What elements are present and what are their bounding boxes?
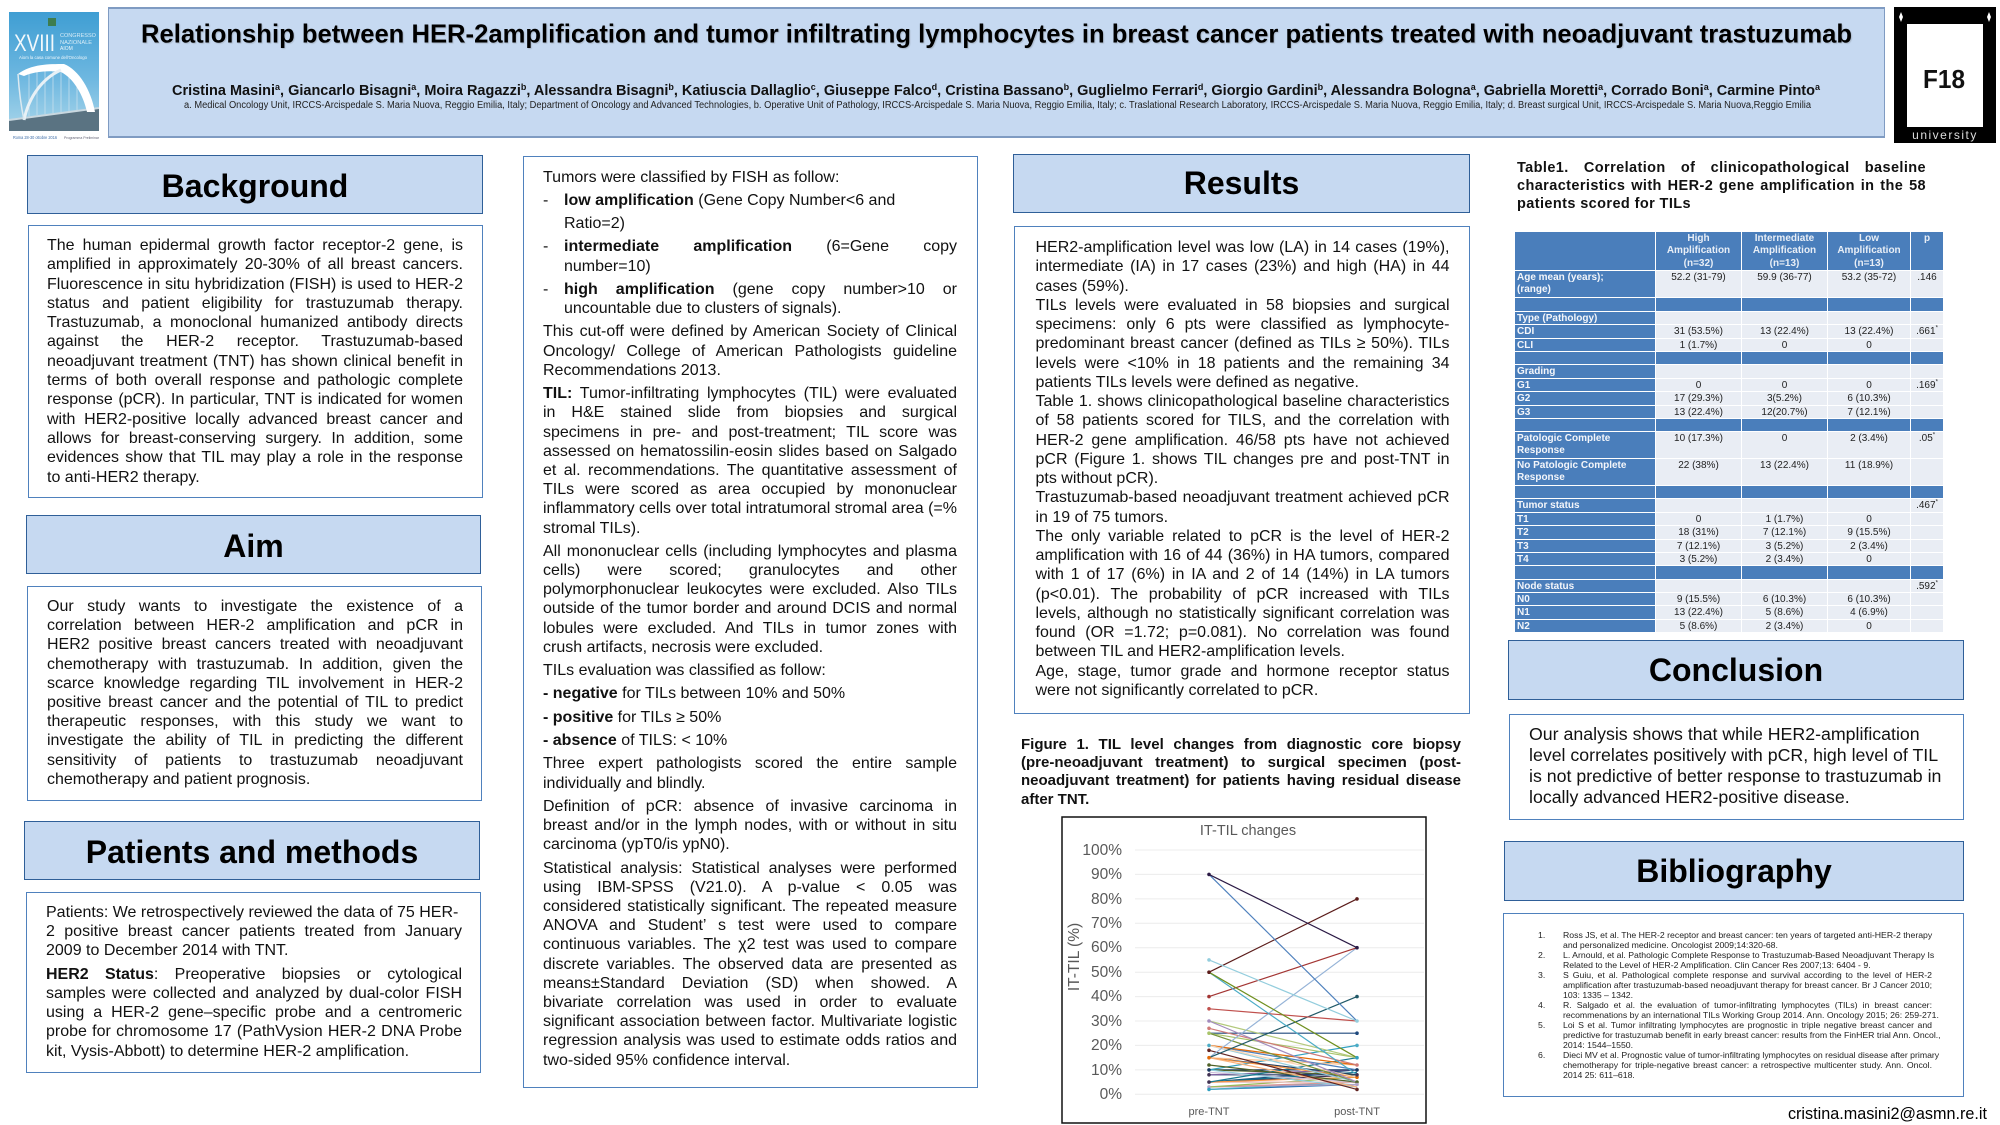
panel: background text: Trastuzumab, a monoclonal humanized antibody directs xyxy=(47,314,463,331)
heading: Results xyxy=(1013,154,1470,213)
table: clinicopathological characteristics: T2 xyxy=(1517,527,1529,538)
table: clinicopathological characteristics: 2 (3.4%) xyxy=(1850,433,1888,444)
figure caption: after TNT. xyxy=(1021,791,1089,808)
heading: Bibliography: Bibliography xyxy=(1636,852,1832,888)
panel: bibliography: chemotherapy for triple-negative breast cancer: a retrospective multicenter study. Ann. Oncol. xyxy=(1563,1060,1932,1070)
panel: results text: in 19 of 75 tumors. xyxy=(1036,508,1168,526)
table: clinicopathological characteristics: 1 (1.7%) xyxy=(1766,514,1803,525)
panel: bibliography: 4. xyxy=(1538,1000,1545,1010)
panel: patients and methods text: 2009 to December 2014 with TNT. xyxy=(46,942,288,959)
panel: results text: TILs levels were evaluated in 58 biopsies and surgical xyxy=(1036,297,1450,314)
panel: methods continued: breast and/or in the lymph nodes, with or without in situ xyxy=(543,817,957,834)
panel: methods continued: assessed on hematossilin-eosin slides based on Salgado xyxy=(543,443,957,460)
table: clinicopathological characteristics: 0 xyxy=(1782,433,1787,444)
heading: Bibliography xyxy=(1504,841,1964,901)
line chart: IT-TIL changes: 0% xyxy=(1100,1086,1122,1103)
panel: aim text: sensitivity of patients to trastuzumab neoadjuvant xyxy=(47,752,463,769)
table: clinicopathological characteristics: 6 (10.3%) xyxy=(1847,594,1891,605)
panel: aim text: therapeutic responses, with this study we want to xyxy=(47,713,463,730)
panel: results text: were not significantly correlated to pCR. xyxy=(1036,682,1318,699)
panel: conclusion text: locally advanced HER2-positive disease. xyxy=(1529,787,1850,807)
table: clinicopathological characteristics: (n=13) xyxy=(1770,258,1799,269)
table: clinicopathological characteristics: G2 xyxy=(1517,393,1530,404)
panel: patients and methods text: Patients: We retrospectively reviewed the data of 75 HER- xyxy=(46,904,458,921)
line chart: IT-TIL changes: 30% xyxy=(1091,1013,1122,1030)
table: clinicopathological characteristics: Amplification xyxy=(1837,245,1901,256)
figure caption: (pre-neoadjuvant treatment) to surgical specimen (post- xyxy=(1021,754,1461,771)
line chart: IT-TIL changes: 60% xyxy=(1091,939,1122,956)
title xyxy=(141,18,1852,111)
table title: Table1. Correlation of clinicopathological baseline xyxy=(1517,160,1926,176)
panel: bibliography: 6. xyxy=(1538,1050,1545,1060)
panel: methods continued: uncountable due to clusters of signals). xyxy=(564,300,842,317)
panel: results text: Table 1. shows clinicopathological baseline characteristics xyxy=(1036,393,1450,410)
table: clinicopathological characteristics: 59.9 (36-77) xyxy=(1757,272,1812,283)
table: clinicopathological characteristics: N2 xyxy=(1517,621,1530,632)
table title: patients scored for TILs xyxy=(1517,196,1691,212)
table: clinicopathological characteristics: T1 xyxy=(1517,514,1529,525)
table: clinicopathological characteristics: 0 xyxy=(1782,340,1787,351)
panel: methods continued: means±Standard Deviation (SD) when showed. A xyxy=(543,975,957,992)
table: clinicopathological characteristics: N0 xyxy=(1517,594,1530,605)
panel: results text: cases (59%). xyxy=(1036,278,1129,294)
table: clinicopathological characteristics: CLI xyxy=(1517,340,1533,351)
table: clinicopathological characteristics: 2 (3.4%) xyxy=(1766,621,1803,632)
table title: characteristics with HER-2 gene amplification in the 58 xyxy=(1517,178,1926,194)
title: Cristina Masinia, Giancarlo Bisagnia, Moira Ragazzib, Alessandra Bisagnib, Katiuscia Dallaglioc, Giuseppe Falcod, Cristina Bassanob, Guglielmo Ferrarid, Giorgio Gardinib, Alessandra Bolognaa, Gabriella Morettia, Corrado Bonia, Carmine Pintoa xyxy=(172,82,1821,99)
panel: results text: found (OR =1.72; p=0.081). No correlation was found xyxy=(1036,624,1450,641)
icon: congress poster: XVIII xyxy=(14,29,55,56)
icon: congress poster: Aiom la casa comune dell'Oncologo xyxy=(19,55,88,60)
heading: Conclusion: Conclusion xyxy=(1649,652,1823,688)
title: Relationship between HER-2amplification and tumor infiltrating lymphocytes in breast cancer patients treated with neoadjuvant trastuzumab xyxy=(141,18,1852,48)
table: clinicopathological characteristics: 0 xyxy=(1696,380,1701,391)
panel: aim text: chemotherapy with trastuzumab. In addition, given the xyxy=(47,656,463,673)
panel: conclusion text xyxy=(1509,714,1964,820)
line chart: IT-TIL changes: 10% xyxy=(1091,1062,1122,1079)
panel: bibliography: Related to the Level of HER-2 Amplification. Clin Cancer Res 2007;13: 6404 - 9. xyxy=(1563,960,1871,970)
panel: methods continued: using IBM-SPSS (V21.0). A p-value < 0.05 was xyxy=(543,879,957,896)
panel: methods continued: low amplification (Gene Copy Number<6 and xyxy=(564,192,895,209)
table: clinicopathological characteristics: 3(5.2%) xyxy=(1767,393,1802,404)
panel: bibliography: R. Salgado et al. the evaluation of tumor-infiltrating lymphocytes (TILs) in breast cancer: xyxy=(1563,1000,1932,1010)
table: clinicopathological characteristics: Amplification xyxy=(1753,245,1816,256)
table: clinicopathological characteristics: 12(20.7%) xyxy=(1761,407,1808,418)
table: clinicopathological characteristics: Tumor status xyxy=(1517,500,1580,511)
table: clinicopathological characteristics: 3 (5.2%) xyxy=(1766,541,1803,552)
table: clinicopathological characteristics: p xyxy=(1924,233,1930,244)
table: clinicopathological characteristics: Intermediate xyxy=(1755,233,1814,244)
table: clinicopathological characteristics: 11 (18.9%) xyxy=(1845,460,1893,471)
heading: Aim: Aim xyxy=(223,528,284,564)
heading: Patients and methods xyxy=(24,821,480,880)
panel: bibliography: 2. xyxy=(1538,950,1545,960)
table: clinicopathological characteristics: Type (Pathology) xyxy=(1517,313,1597,324)
table: clinicopathological characteristics: High xyxy=(1687,233,1710,244)
heading: Aim xyxy=(26,515,481,574)
panel: results text: patients TILs levels were defined as negative. xyxy=(1036,374,1359,391)
table: clinicopathological characteristics: 9 (15.5%) xyxy=(1847,527,1891,538)
panel: methods continued: Oncology/ College of American Pathologists guideline xyxy=(543,343,957,360)
table: clinicopathological characteristics: N1 xyxy=(1517,607,1530,618)
panel: bibliography: L. Arnould, et al. Pathologic Complete Response to Trastuzumab-Based Neoadjuvant Therapy Is xyxy=(1563,950,1934,960)
panel: bibliography: 2014: 1544–1550. xyxy=(1563,1040,1633,1050)
line chart: IT-TIL changes: 50% xyxy=(1091,964,1122,981)
panel: methods continued: regression analysis was used to estimate odds ratios and xyxy=(543,1032,957,1049)
panel: background text xyxy=(28,225,483,498)
panel: methods continued: TIL: Tumor-infiltrating lymphocytes (TIL) were evaluated xyxy=(543,385,957,402)
table: clinicopathological characteristics xyxy=(1515,232,1943,632)
header banner xyxy=(108,7,1885,138)
panel: bibliography: Dieci MV et al. Prognostic value of tumor-infiltrating lymphocytes on residual disease after primary xyxy=(1563,1050,1939,1060)
heading: Conclusion xyxy=(1508,640,1964,700)
panel: aim text: HER2 positive breast cancers treated with neoadjuvant xyxy=(47,636,463,653)
panel: background text: Fluorescence in situ hybridization (FISH) is used to HER-2 xyxy=(47,276,463,293)
table: clinicopathological characteristics: Patologic Complete xyxy=(1517,433,1610,444)
panel: methods continued: individually and blindly. xyxy=(543,775,705,792)
panel: methods continued: et al. recommendations. The quantitative assessment of xyxy=(543,462,957,479)
panel: background text: amplified in approximately 20-30% of all breast cancers. xyxy=(47,256,463,273)
table: clinicopathological characteristics: 13 (22.4%) xyxy=(1760,326,1809,337)
panel: patients and methods text xyxy=(26,892,481,1073)
table: clinicopathological characteristics: .169* xyxy=(1916,380,1938,391)
panel: methods continued xyxy=(523,156,978,1088)
panel: results text: (p<0.01). The probability of pCR increased with TILs xyxy=(1036,586,1450,602)
panel: methods continued: - negative for TILs between 10% and 50% xyxy=(543,685,845,702)
panel: aim text: correlation between HER-2 amplification and pCR in xyxy=(47,617,463,634)
table: clinicopathological characteristics: 4 (6.9%) xyxy=(1850,607,1888,618)
table: clinicopathological characteristics: 7 (12.1%) xyxy=(1847,407,1891,418)
panel: bibliography: amplification after trastuzumab-based neoadjuvant therapy for breast cancer. Br J Cancer 2010; xyxy=(1563,980,1932,990)
table: clinicopathological characteristics: No Patologic Complete xyxy=(1517,460,1626,471)
panel: methods continued: considered statistically significant. The repeated measure xyxy=(543,898,957,915)
panel: results text: of 58 patients scored for TILS, and the correlation with xyxy=(1036,412,1450,429)
icon: congress poster xyxy=(9,12,99,140)
table: clinicopathological characteristics: T3 xyxy=(1517,541,1529,552)
table: clinicopathological characteristics: 0 xyxy=(1866,380,1872,391)
table: clinicopathological characteristics: Amplification xyxy=(1667,245,1730,256)
table: clinicopathological characteristics: 10 (17.3%) xyxy=(1674,433,1723,444)
logo: F18 university: F18 xyxy=(1923,64,1965,94)
panel: methods continued: - positive for TILs ≥ 50% xyxy=(543,709,721,726)
panel: background text: status and patient eligibility for trastuzumab therapy. xyxy=(47,295,463,312)
panel: bibliography: Loi S et al. Tumor infiltrating lymphocytes are prognostic in triple negative breast cancer and xyxy=(1563,1020,1932,1030)
panel: methods continued: lobules were excluded. And TILs in tumor zones with xyxy=(543,620,957,637)
line chart: IT-TIL changes: 40% xyxy=(1091,988,1122,1005)
panel: results text: with 1 of 17 (6%) in IA and 2 of 14 (14%) in LA tumors xyxy=(1036,566,1450,583)
panel: aim text: positive breast cancer and the potential of TIL to predict xyxy=(47,694,463,711)
table: clinicopathological characteristics: Grading xyxy=(1517,366,1555,377)
table: clinicopathological characteristics: 0 xyxy=(1866,340,1872,351)
table: clinicopathological characteristics: Low xyxy=(1859,233,1879,244)
table: clinicopathological characteristics: Node status xyxy=(1517,581,1574,592)
panel: bibliography: and personalized medicine. Oncologist 2009;14:320-68. xyxy=(1563,940,1778,950)
panel: methods continued: Ratio=2) xyxy=(564,215,625,232)
table: clinicopathological characteristics: 13 (22.4%) xyxy=(1674,407,1723,418)
table: clinicopathological characteristics: 2 (3.4%) xyxy=(1766,554,1803,565)
panel: background text: neoadjuvant treatment (TNT) has shown clinical benefit in xyxy=(47,353,463,370)
panel: bibliography: recommenations by an international TILs Working Group 2014. Ann. Oncology 2015; 26: 259-271. xyxy=(1563,1010,1939,1020)
panel: methods continued: All mononuclear cells (including lymphocytes and plasma xyxy=(543,543,957,560)
panel: results text: The only variable related to pCR is the level of HER-2 xyxy=(1036,528,1450,545)
panel: results text: HER-2 gene amplification. 46/58 pts have not achieved xyxy=(1036,432,1450,448)
panel: methods continued: - absence of TILS: < 10% xyxy=(543,732,727,749)
table: clinicopathological characteristics: 13 (22.4%) xyxy=(1760,460,1809,471)
heading: Results: Results xyxy=(1184,165,1299,201)
panel: methods continued: TILs were scored as area occupied by mononuclear xyxy=(543,481,957,498)
table: clinicopathological characteristics: 17 (29.3%) xyxy=(1674,393,1723,404)
table: clinicopathological characteristics: 0 xyxy=(1866,621,1872,632)
panel: methods continued: bivariate correlation was used in order to evaluate xyxy=(543,994,957,1011)
table: clinicopathological characteristics: 13 (22.4%) xyxy=(1845,326,1893,337)
logo: F18 university xyxy=(1894,7,1996,143)
panel: background text: response (pCR). In particular, TNT is indicated for women xyxy=(47,391,463,408)
panel: aim text: Our study wants to investigate the existence of a xyxy=(47,598,463,615)
table: clinicopathological characteristics: 13 (22.4%) xyxy=(1674,607,1723,618)
table: clinicopathological characteristics: Response xyxy=(1517,472,1565,483)
panel: methods continued: Recommendations 2013. xyxy=(543,362,721,379)
table: clinicopathological characteristics: .146 xyxy=(1917,272,1937,283)
panel: methods continued: - xyxy=(543,238,548,255)
panel: bibliography: 2014 25: 611–618. xyxy=(1563,1070,1635,1080)
table: clinicopathological characteristics: 0 xyxy=(1782,380,1787,391)
panel: background text: against the HER-2 receptor. Trastuzumab-based xyxy=(47,333,463,350)
panel: results text: Age, stage, tumor grade and hormone receptor status xyxy=(1036,662,1450,680)
table: clinicopathological characteristics: 2 (3.4%) xyxy=(1850,541,1888,552)
panel: patients and methods text: HER2 Status: Preoperative biopsies or cytological xyxy=(46,966,462,983)
panel: patients and methods text: probe for chromosome 17 (PathVysion HER-2 DNA Probe xyxy=(46,1023,462,1040)
panel: patients and methods text: using a HER-2 gene–specific probe and a centromeric xyxy=(46,1004,462,1021)
panel: methods continued: Definition of pCR: absence of invasive carcinoma in xyxy=(543,798,957,815)
line chart: IT-TIL changes: post-TNT xyxy=(1334,1106,1380,1118)
panel: patients and methods text: samples were collected and analyzed by dual-color FISH xyxy=(46,985,462,1002)
table: clinicopathological characteristics: 18 (31%) xyxy=(1678,527,1719,538)
panel: background text: allows for breast-conserving surgery. In addition, some xyxy=(47,430,463,447)
table: clinicopathological characteristics: Response xyxy=(1517,445,1565,456)
panel: methods continued: polymorphonuclear leukocytes were excluded. Also TILs xyxy=(543,581,957,598)
panel: methods continued: intermediate amplification (6=Gene copy xyxy=(564,238,957,255)
table: clinicopathological characteristics: (n=32) xyxy=(1684,258,1713,269)
table: clinicopathological characteristics: (n=13) xyxy=(1854,258,1884,269)
panel: results text: predominant breast cancer (defined as TILs ≥ 50%). TILs xyxy=(1036,335,1450,352)
panel: methods continued: ANOVA and Student’ s test were used to compare xyxy=(543,917,957,934)
panel: results text: pCR (Figure 1. shows TIL changes pre and post-TNT in xyxy=(1036,451,1450,468)
panel: methods continued: carcinoma (ypT0/is ypN0). xyxy=(543,836,730,853)
panel: bibliography: 5. xyxy=(1538,1020,1545,1030)
figure caption xyxy=(1021,736,1461,808)
table: clinicopathological characteristics: 3 (5.2%) xyxy=(1680,554,1717,565)
line chart: IT-TIL changes: pre-TNT xyxy=(1189,1106,1230,1118)
logo: F18 university: university xyxy=(1912,128,1978,142)
table: clinicopathological characteristics: 7 (12.1%) xyxy=(1677,541,1720,552)
line chart: IT-TIL changes: IT-TIL changes xyxy=(1200,823,1296,839)
line chart: IT-TIL changes: 70% xyxy=(1091,915,1122,932)
table: clinicopathological characteristics: CDI xyxy=(1517,326,1534,337)
table: clinicopathological characteristics: 52.2 (31-79) xyxy=(1671,272,1726,283)
panel: bibliography: predictive for trastuzumab benefit in early breast cancer: results from the FinHER trial Ann. Oncol., xyxy=(1563,1030,1941,1040)
heading: Background: Background xyxy=(162,168,348,204)
panel: results text: intermediate (IA) in 17 cases (23%) and high (HA) in 44 xyxy=(1036,258,1450,275)
panel: results text: pts without pCR). xyxy=(1036,470,1158,487)
panel: methods continued: - xyxy=(543,192,548,209)
panel: bibliography: 103: 1335 – 1342. xyxy=(1563,990,1633,1000)
panel: results text: levels were <10% in 18 patients and the remaining 34 xyxy=(1036,354,1450,372)
panel: methods continued: number=10) xyxy=(564,258,651,275)
table: clinicopathological characteristics: 31 (53.5%) xyxy=(1674,326,1723,337)
table: clinicopathological characteristics: G1 xyxy=(1517,380,1530,391)
table: clinicopathological characteristics: Age mean (years); xyxy=(1517,272,1604,283)
panel: bibliography: Ross JS, et al. The HER-2 receptor and breast cancer: ten years of targeted anti-HER-2 therapy xyxy=(1563,930,1932,940)
panel: methods continued: continuous variables. The χ2 test was used to compare xyxy=(543,936,957,953)
heading: Background xyxy=(27,155,483,214)
icon: congress poster: NAZIONALE xyxy=(60,40,92,46)
panel: background text: to anti-HER2 therapy. xyxy=(47,469,200,486)
table: clinicopathological characteristics: G3 xyxy=(1517,407,1530,418)
line chart: IT-TIL changes xyxy=(1061,816,1427,1124)
panel: conclusion text: is not predictive of better response to trastuzumab in xyxy=(1529,766,1941,786)
table: clinicopathological characteristics: .467* xyxy=(1916,500,1938,511)
panel: methods continued: specimens in pre- and post-treatment; TIL score was xyxy=(543,424,957,440)
line chart: IT-TIL changes: 80% xyxy=(1091,891,1122,908)
panel: aim text: investigate the ability of TIL in predicting the different xyxy=(47,732,463,749)
table: clinicopathological characteristics: 0 xyxy=(1866,514,1872,525)
panel: methods continued: TILs evaluation was classified as follow: xyxy=(543,662,826,679)
panel: patients and methods text: kit, Vysis-Abbott) to determine HER-2 amplification. xyxy=(46,1043,409,1060)
panel: patients and methods text: 2 positive breast cancer patients treated from January xyxy=(46,923,462,940)
table title xyxy=(1517,160,1926,212)
figure caption: Figure 1. TIL level changes from diagnostic core biopsy xyxy=(1021,736,1461,752)
panel: methods continued: in H&E stained slide from biopsies and surgical xyxy=(543,404,957,421)
figure caption: neoadjuvant treatment) for patients having residual disease xyxy=(1021,772,1461,789)
panel: methods continued: - xyxy=(543,281,548,298)
panel: conclusion text: Our analysis shows that while HER2-amplification xyxy=(1529,724,1920,744)
panel: methods continued: discrete variables. The observed data are presented as xyxy=(543,956,957,973)
panel: bibliography: S Guiu, et al. Pathological complete response and survival according to the level of HER-2 xyxy=(1563,970,1932,980)
icon: congress poster: AIOM xyxy=(60,46,73,52)
line chart: IT-TIL changes: IT-TIL (%) xyxy=(1066,923,1083,991)
panel: aim text: chemotherapy and patient prognosis. xyxy=(47,771,310,788)
panel: methods continued: Tumors were classified by FISH as follow: xyxy=(543,168,839,186)
panel: conclusion text: level correlates positively with pCR, high level of TIL xyxy=(1529,745,1938,765)
panel: bibliography: 1. xyxy=(1538,930,1545,940)
panel: results text: specimens: only 6 pts were classified as lymphocyte- xyxy=(1036,316,1450,333)
line chart: IT-TIL changes: 20% xyxy=(1091,1037,1122,1054)
icon: congress poster: CONGRESSO xyxy=(60,33,97,39)
table: clinicopathological characteristics: .05* xyxy=(1919,433,1935,444)
panel: methods continued: stromal TILs). xyxy=(543,520,640,537)
panel: results text: levels, although no statistically significant correlation was xyxy=(1036,605,1450,622)
table: clinicopathological characteristics: 0 xyxy=(1866,554,1872,565)
table: clinicopathological characteristics: (range) xyxy=(1517,284,1551,295)
table: clinicopathological characteristics: .661* xyxy=(1916,326,1938,337)
table: clinicopathological characteristics: 7 (12.1%) xyxy=(1763,527,1806,538)
panel: results text: Trastuzumab-based neoadjuvant treatment achieved pCR xyxy=(1036,489,1450,506)
contact email: cristina.masini2@asmn.re.it xyxy=(1788,1105,1987,1123)
icon: congress poster: Roma 28-30 ottobre 2016 xyxy=(13,135,57,140)
panel: results text: amplification with 16 of 44 (36%) in HA tumors, compared xyxy=(1036,547,1450,564)
panel: methods continued: two-sided 95% confidence interval. xyxy=(543,1052,790,1069)
panel: methods continued: significant association between factor. Multivariate logistic xyxy=(543,1013,957,1030)
panel: background text: evidences show that TIL may play a role in the response xyxy=(47,449,463,466)
panel: results text: HER2-amplification level was low (LA) in 14 cases (19%), xyxy=(1036,239,1450,256)
panel: background text: terms of both overall response and pathologic complete xyxy=(47,372,463,389)
panel: methods continued: This cut-off were defined by American Society of Clinical xyxy=(543,323,957,340)
panel: methods continued: high amplification (gene copy number>10 or xyxy=(564,281,957,298)
title: a. Medical Oncology Unit, IRCCS-Arcispedale S. Maria Nuova, Reggio Emilia, Italy; Department of Oncology and Advanced Technologies, b. Operative Unit of Pathology, IRCCS-Arcispedale S. Maria Nuova, Reggio Emilia, Italy; c. Traslational Research Laboratory, IRCCS-Arcispedale S. Maria Nuova, Reggio Emilia, Italy; d. Breast surgical Unit, IRCCS-Arcispedale S. Maria Nuova,Reggio Emilia xyxy=(184,100,1811,111)
line chart: IT-TIL changes: 100% xyxy=(1082,842,1122,859)
panel: methods continued: outside of the tumor border and around DCIS and normal xyxy=(543,600,957,617)
panel: aim text: scarce knowledge regarding TIL involvement in HER-2 xyxy=(47,675,463,692)
table: clinicopathological characteristics: .592* xyxy=(1916,581,1938,592)
panel: aim text xyxy=(27,586,482,801)
panel: results text: between TIL and HER2-amplification levels. xyxy=(1036,643,1345,660)
panel: methods continued: Statistical analysis: Statistical analyses were performed xyxy=(543,860,957,877)
panel: results text xyxy=(1014,226,1470,714)
panel: methods continued: crush artifacts, necrosis were excluded. xyxy=(543,639,823,656)
table: clinicopathological characteristics: 22 (38%) xyxy=(1678,460,1719,471)
panel: bibliography: 3. xyxy=(1538,970,1545,980)
line chart: IT-TIL changes: 90% xyxy=(1091,866,1122,883)
table: clinicopathological characteristics: 0 xyxy=(1696,514,1701,525)
table: clinicopathological characteristics: 5 (8.6%) xyxy=(1766,607,1803,618)
table: clinicopathological characteristics: 5 (8.6%) xyxy=(1680,621,1717,632)
panel: background text: The human epidermal growth factor receptor-2 gene, is xyxy=(47,237,463,254)
panel: bibliography xyxy=(1503,913,1964,1097)
panel: methods continued: cells) were scored; granulocytes and other xyxy=(543,562,957,579)
panel: background text: with HER2-positive locally advanced breast cancer and xyxy=(47,411,463,428)
table: clinicopathological characteristics: 6 (10.3%) xyxy=(1763,594,1806,605)
table: clinicopathological characteristics: T4 xyxy=(1517,554,1529,565)
panel: methods continued: Three expert pathologists scored the entire sample xyxy=(543,755,957,772)
table: clinicopathological characteristics: 6 (10.3%) xyxy=(1847,393,1891,404)
panel: methods continued: inflammatory cells over total intratumoral stromal area (=% xyxy=(543,500,957,517)
table: clinicopathological characteristics: 9 (15.5%) xyxy=(1677,594,1720,605)
heading: Patients and methods: Patients and methods xyxy=(86,834,418,870)
table: clinicopathological characteristics: 1 (1.7%) xyxy=(1680,340,1717,351)
table: clinicopathological characteristics: 53.2 (35-72) xyxy=(1842,272,1896,283)
